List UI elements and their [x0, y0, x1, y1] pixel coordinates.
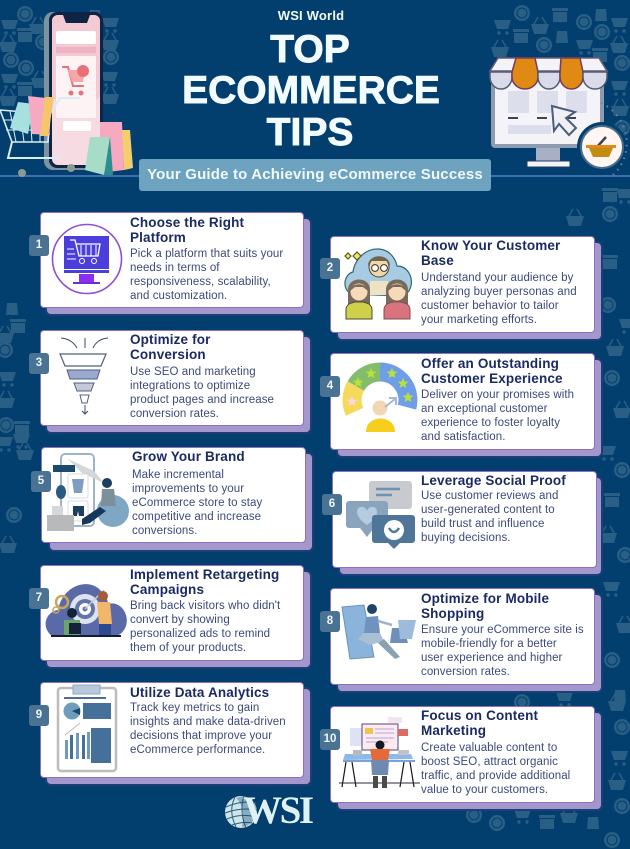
number badge 10: 10 — [324, 733, 336, 745]
heading: Campaigns — [130, 582, 204, 597]
text block: Track key metrics to gain — [130, 702, 259, 714]
icon: mobile storefront with shopper — [47, 453, 129, 531]
text block: eCommerce store to stay — [132, 497, 262, 509]
text block: Use SEO and marketing — [130, 366, 256, 378]
logo: WSI — [224, 794, 314, 830]
heading: Utilize Data Analytics — [130, 685, 269, 700]
text block — [421, 490, 558, 544]
text block: Bring back visitors who didn't — [130, 600, 280, 612]
number badge 3: 3 — [36, 357, 42, 369]
text block: user-generated content to — [421, 504, 555, 516]
text block: decisions that improve your — [130, 730, 272, 742]
heading: Conversion — [130, 347, 206, 362]
heading — [130, 567, 279, 597]
text block: value to your customers. — [421, 784, 548, 796]
icon: mobile shopper — [341, 604, 416, 660]
text block: experience to foster loyalty — [421, 417, 560, 429]
text block: improvements to your — [132, 483, 244, 495]
text block: responsiveness, scalability, — [130, 276, 271, 288]
panel: tip 1 — [29, 212, 312, 316]
icon: data analytics clipboard — [56, 684, 118, 772]
heading: Focus on Content — [421, 708, 538, 723]
heading: Optimize for — [130, 332, 211, 347]
number badge 8: 8 — [327, 615, 333, 627]
text block: and customization. — [130, 290, 227, 302]
text block: personalized ads to remind — [130, 628, 270, 640]
text block: product pages and increase — [130, 394, 274, 406]
heading: Offer an Outstanding — [421, 356, 559, 371]
icon: conversion funnel — [59, 338, 108, 415]
text block: Ensure your eCommerce site is — [421, 624, 584, 636]
panel: tip 4 — [320, 353, 603, 458]
panel: tip 7 — [29, 565, 312, 669]
number badge 1 — [29, 235, 49, 256]
number badge 6 — [322, 494, 342, 515]
title: TIPS — [267, 111, 353, 154]
panel: tip 3 — [29, 330, 312, 434]
heading: Marketing — [421, 723, 486, 738]
text block: conversions. — [132, 525, 198, 537]
heading: Customer Experience — [421, 371, 563, 386]
number badge 4 — [320, 376, 340, 397]
heading: Optimize for Mobile — [421, 591, 549, 606]
icon: customer group — [344, 248, 412, 320]
horizontal rule — [0, 174, 630, 176]
text block: integrations to optimize — [130, 380, 250, 392]
panel: tip 9 — [29, 682, 312, 786]
text block: them of your products. — [130, 642, 246, 654]
text block — [130, 702, 286, 756]
number badge 10 — [320, 729, 340, 750]
number badge 5: 5 — [38, 475, 44, 487]
number badge 8 — [320, 611, 340, 632]
title: ECOMMERCE — [182, 69, 440, 112]
heading — [421, 356, 563, 386]
text block: Pick a platform that suits your — [130, 248, 283, 260]
number badge 2: 2 — [327, 262, 333, 274]
icon: social proof speech bubbles — [346, 481, 415, 549]
icon: online storefront on monitor — [488, 57, 628, 176]
icon: globe — [224, 795, 258, 829]
text block: mobile-friendly for a better — [421, 638, 557, 650]
text block: eCommerce performance. — [130, 744, 265, 756]
icon: person at desk creating content — [339, 717, 420, 788]
heading: Leverage Social Proof — [421, 473, 566, 488]
icon: retargeting target with team — [46, 584, 127, 637]
text block: and satisfaction. — [421, 431, 505, 443]
text block — [421, 389, 574, 443]
heading — [130, 215, 244, 245]
text block — [132, 469, 262, 537]
text block: Create valuable content to — [421, 742, 557, 754]
heading: Base — [421, 253, 454, 268]
text block — [130, 600, 280, 654]
heading — [421, 591, 549, 621]
text block — [130, 366, 274, 420]
header label: WSI World — [278, 8, 344, 23]
text block: Deliver on your promises with — [421, 389, 574, 401]
text block: boost SEO, attract organic — [421, 756, 558, 768]
text block — [421, 272, 577, 326]
panel: tip 2 — [320, 236, 603, 341]
icon: computer shopping cart — [52, 224, 122, 294]
text block: buying decisions. — [421, 532, 511, 544]
text block: insights and make data-driven — [130, 716, 286, 728]
text block: Use customer reviews and — [421, 490, 558, 502]
text block: analyzing buyer personas and — [421, 286, 577, 298]
number badge 9: 9 — [36, 709, 42, 721]
number badge 4: 4 — [327, 380, 333, 392]
text block — [421, 624, 584, 678]
text block: customer behavior to tailor — [421, 300, 559, 312]
text block: needs in terms of — [130, 262, 220, 274]
icon: smartphone with shopping cart and bags — [0, 12, 133, 177]
text block: conversion rates. — [421, 666, 510, 678]
number badge 7: 7 — [36, 592, 42, 604]
panel: tip 8 — [320, 588, 603, 693]
number badge 3 — [29, 353, 49, 374]
icon: rainbow star rating with customer — [342, 362, 418, 432]
number badge 5 — [31, 471, 51, 492]
heading — [421, 708, 538, 738]
text block: build trust and influence — [421, 518, 544, 530]
heading — [130, 332, 211, 362]
text block: competitive and increase — [132, 511, 261, 523]
heading: Implement Retargeting — [130, 567, 279, 582]
text block: an exceptional customer — [421, 403, 548, 415]
number badge 2 — [320, 258, 340, 279]
heading — [421, 238, 560, 268]
text block: Understand your audience by — [421, 272, 573, 284]
panel: tip 10 — [320, 706, 603, 811]
number badge 9 — [29, 705, 49, 726]
text block: user experience and higher — [421, 652, 562, 664]
text block: convert by showing — [130, 614, 230, 626]
panel: tip 6 — [322, 471, 603, 576]
heading: Grow Your Brand — [132, 449, 245, 464]
panel: tip 5 — [31, 447, 314, 552]
wordmark: WSI — [243, 789, 312, 832]
heading: Platform — [130, 230, 186, 245]
text block — [130, 248, 283, 302]
heading: Know Your Customer — [421, 238, 560, 253]
text block: traffic, and provide additional — [421, 770, 570, 782]
subtitle banner — [139, 159, 491, 191]
title: TOP — [270, 28, 350, 71]
text block — [421, 742, 570, 796]
subtitle banner: Your Guide to Achieving eCommerce Success — [147, 166, 483, 183]
heading: Shopping — [421, 606, 484, 621]
text block: your marketing efforts. — [421, 314, 537, 326]
title — [182, 28, 440, 154]
text block: Make incremental — [132, 469, 224, 481]
number badge 1: 1 — [36, 239, 42, 251]
text block: conversion rates. — [130, 408, 219, 420]
heading: Choose the Right — [130, 215, 244, 230]
number badge 6: 6 — [329, 498, 335, 510]
number badge 7 — [29, 588, 49, 609]
